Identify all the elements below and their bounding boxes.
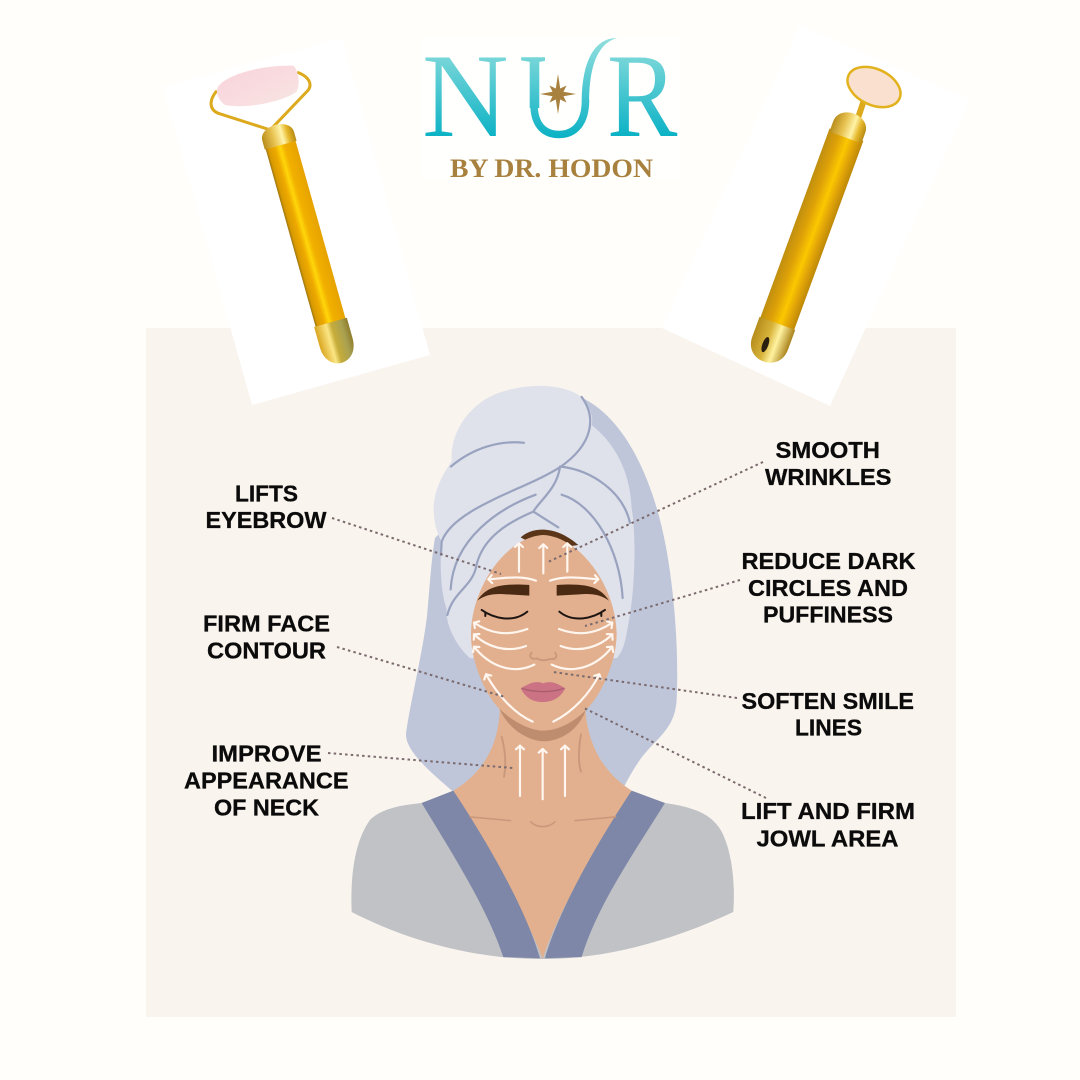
face (471, 535, 617, 731)
illustration: woman with towel (351, 386, 734, 959)
logo: NUR by Dr. Hodon (425, 38, 678, 178)
label: reduce dark circles and puffiness: CIRCLES AND (748, 575, 908, 601)
neck and chest (453, 703, 632, 959)
dotted leader lines (328, 462, 766, 798)
robe collar right (545, 791, 665, 958)
label: improve appearance of neck: OF NECK (214, 794, 319, 820)
logo letter N: N (422, 29, 509, 162)
facial features in 3x coordinates (471, 530, 617, 799)
closed eyes (482, 610, 605, 619)
label: reduce dark circles and puffiness: REDUCE DARK (742, 548, 916, 574)
collarbone lines (470, 817, 616, 827)
label: lift and firm jowl area: LIFT AND FIRM (741, 798, 915, 824)
left roller body (259, 120, 358, 367)
label: improve appearance of neck (184, 740, 348, 820)
right roller stem (858, 100, 864, 118)
label: soften smile lines: LINES (795, 714, 862, 740)
left roller: rose quartz double frame (211, 66, 358, 367)
towel wrap (434, 386, 635, 658)
left roller frame (211, 73, 310, 129)
label: lift and firm jowl area: JOWL AREA (756, 826, 898, 852)
left product card (163, 38, 430, 405)
label: improve appearance of neck: IMPROVE (212, 740, 322, 766)
label: soften smile lines: SOFTEN SMILE (742, 688, 914, 714)
label: reduce dark circles and puffiness: PUFFINESS (763, 602, 893, 628)
label: smooth wrinkles: WRINKLES (765, 464, 892, 490)
left roller stone (217, 66, 299, 106)
label: firm face contour (203, 610, 330, 664)
label: lifts eyebrow (206, 480, 327, 533)
label: firm face contour: FIRM FACE (203, 610, 330, 636)
logo U swash (582, 38, 617, 102)
label: lifts eyebrow: LIFTS (235, 480, 298, 506)
label: smooth wrinkles: SMOOTH (776, 437, 880, 463)
hair (521, 530, 578, 550)
label: lifts eyebrow: EYEBROW (206, 507, 327, 533)
label: firm face contour: CONTOUR (207, 638, 326, 664)
logo U bowl (534, 100, 586, 134)
right roller: single head (746, 59, 907, 368)
label: reduce dark circles and puffiness (742, 548, 916, 628)
lips (521, 682, 565, 702)
robe collar left (422, 791, 540, 958)
beige panel (146, 328, 956, 1017)
logo letter U: U (519, 30, 593, 163)
lip line (522, 688, 564, 692)
towel back drape (406, 397, 677, 792)
logo star (540, 74, 576, 114)
chin shadow (499, 707, 587, 741)
logo backing (422, 38, 680, 178)
right roller body (746, 107, 872, 368)
towel fold lines (441, 397, 630, 615)
logo tagline: BY DR. HODON (450, 154, 653, 183)
eyebrows (477, 584, 609, 601)
right product card (662, 25, 970, 406)
neck creases (502, 734, 581, 777)
robe (351, 792, 734, 959)
massage arrows (474, 543, 612, 799)
label: improve appearance of neck: APPEARANCE (184, 768, 348, 794)
nose (530, 653, 556, 660)
logo letter R: R (607, 30, 678, 163)
label: soften smile lines (742, 688, 914, 740)
right roller head (841, 59, 907, 115)
label: lift and firm jowl area (741, 798, 915, 852)
label: smooth wrinkles (765, 437, 892, 490)
